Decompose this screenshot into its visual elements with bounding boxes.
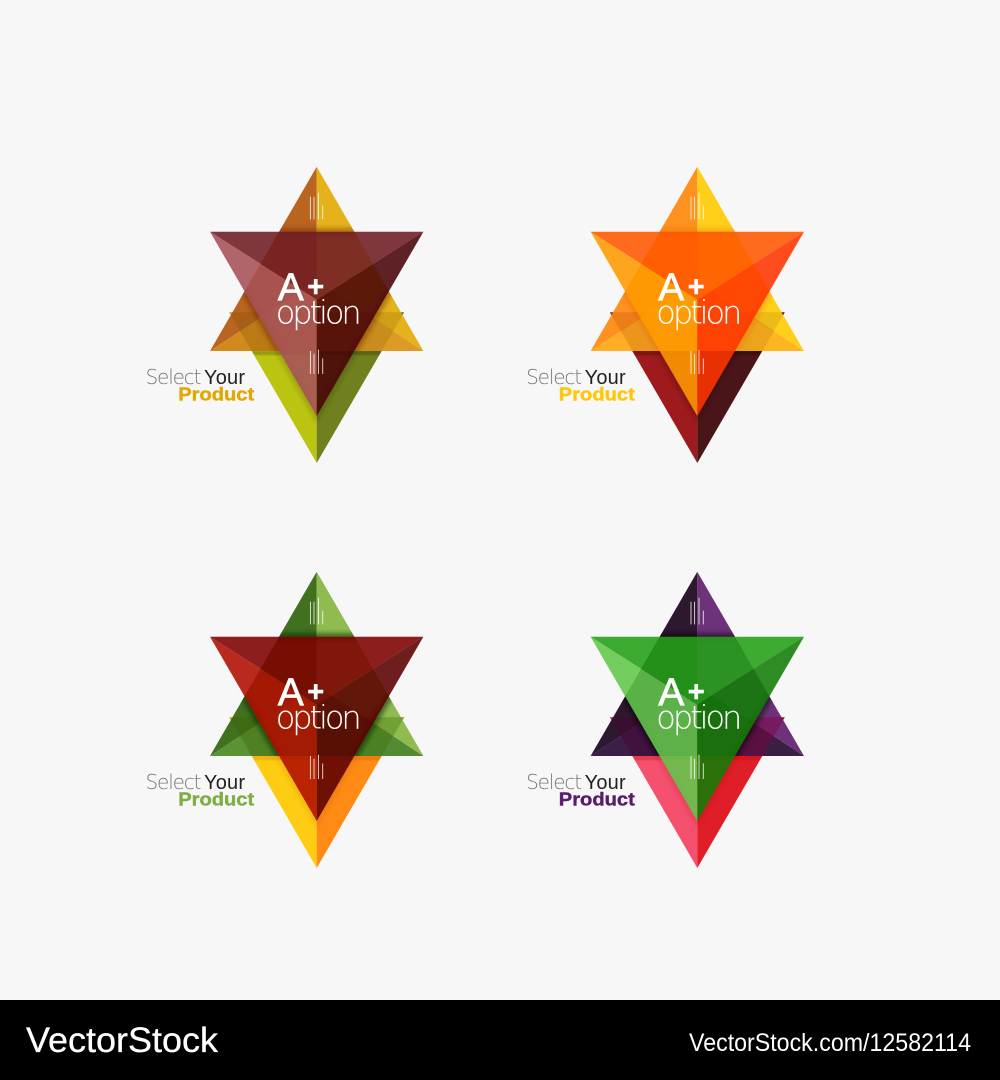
caption: Select Your Product: Product [559,790,635,810]
downward front triangle [591,232,804,416]
label: A+ [278,672,324,715]
panel: star badge top right [526,167,804,463]
caption: Select Your Product: Your [204,772,245,794]
caption: Select Your Product: Select [146,365,202,389]
caption: Select Your Product: Your [585,772,626,794]
label: A+: A [658,672,684,715]
footer bar [0,1000,1000,1080]
caption: Select Your Product [526,770,635,810]
label: option: option [276,698,362,736]
panel: star badge bottom left [146,572,423,868]
icon: tick lines bottom [310,350,323,374]
caption: Select Your Product [146,365,254,405]
lower triangle [229,312,404,463]
label: A+: A [658,267,684,310]
label: A+: + [307,677,324,709]
label: A+ [658,267,705,310]
footer logo text: VectorStock [26,1021,219,1060]
footer url text: VectorStock.com/12582114 [689,1029,971,1057]
caption: Select Your Product: Product [559,385,635,405]
downward front triangle [210,637,423,821]
icon: tick lines top [691,193,703,219]
caption: Select Your Product: Select [526,365,582,389]
upward triangle [590,572,804,756]
icon: tick lines bottom [310,755,323,779]
label: A+ [278,267,324,310]
lower triangle [610,312,785,463]
lower triangle [229,717,404,868]
label: A+ [658,672,705,715]
icon: tick lines top [310,598,323,624]
caption: Select Your Product: Your [585,367,626,389]
upward triangle [210,166,424,351]
panel: star badge top left [146,167,423,463]
label: A+: A [278,267,304,310]
label: option: option [656,293,742,331]
downward front triangle [210,232,423,416]
caption: Select Your Product [526,365,635,405]
label: option: option [656,698,742,736]
label: A+: + [307,272,324,304]
label: A+: + [688,272,705,304]
upward triangle [210,572,424,756]
label: A+: + [688,677,705,709]
upward triangle [590,166,804,351]
caption: Select Your Product: Product [178,790,254,810]
label: A+: A [278,672,304,715]
downward front triangle [591,637,804,821]
caption: Select Your Product: Product [178,385,254,405]
label: option: option [276,293,362,331]
caption: Select Your Product: Select [146,770,202,794]
panel: star badge bottom right [526,572,804,868]
caption: Select Your Product [146,770,254,810]
icon: tick lines bottom [691,755,703,779]
caption: Select Your Product: Your [204,367,245,389]
icon: tick lines bottom [691,350,703,374]
caption: Select Your Product: Select [526,770,582,794]
icon: tick lines top [691,598,703,624]
icon: tick lines top [310,193,323,219]
lower triangle [610,717,785,868]
